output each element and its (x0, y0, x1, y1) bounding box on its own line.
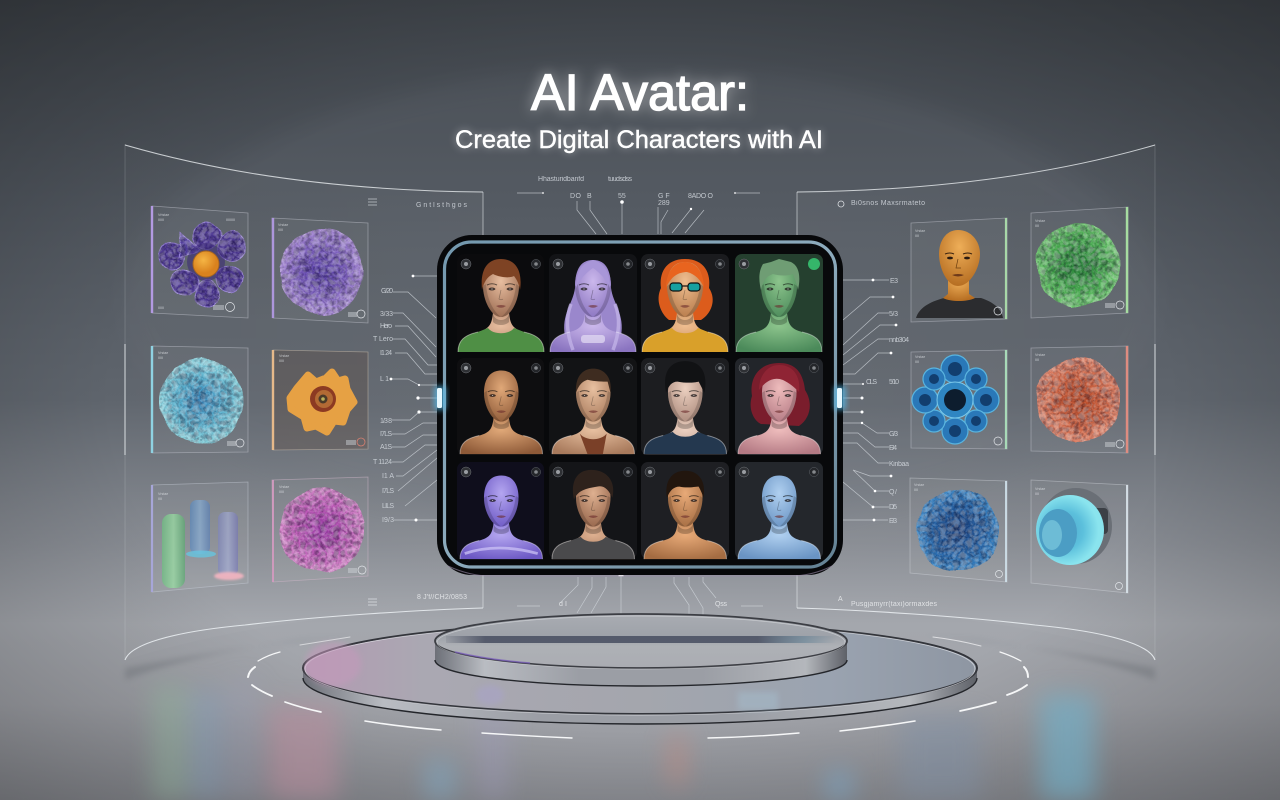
pedestal platform (435, 614, 847, 686)
card: purple cell: Vrstae (278, 223, 288, 227)
card: purple flower: IIIIIIIII (226, 218, 235, 222)
device bezel (437, 235, 843, 575)
left connector lines and labels (373, 275, 437, 524)
left connector lines and labels: 1/3 8 (380, 418, 392, 425)
card: green cell (1031, 207, 1128, 318)
left connector lines and labels: I7LS (380, 431, 392, 438)
top connector labels: G F (658, 193, 670, 200)
card: purple flower: IIIIII (158, 218, 164, 222)
dashed orbit ring (248, 637, 1028, 738)
icon: blue flower petals (912, 355, 999, 444)
avatar: black curly hair, navy top (641, 358, 729, 455)
card: pink cell (272, 477, 368, 582)
card: test tubes: IIII (158, 497, 162, 501)
floor colour reflections (152, 680, 1095, 800)
panel footer left: 8 J'f//CH2/0853 (417, 594, 467, 601)
card: blue cell (910, 478, 1007, 582)
left panel outline arcs (125, 144, 483, 660)
left connector lines and labels: I9/3 (382, 517, 394, 524)
wall to floor curved shadow (125, 632, 1155, 680)
card: orange head (911, 218, 1007, 322)
bottom connector lines and labels: dI (559, 601, 567, 608)
left connector lines and labels: I1 A (382, 473, 394, 480)
device right light (834, 386, 846, 410)
panel header left: Gntlsthgos (416, 202, 468, 209)
card: red cell: Vrstae (1035, 353, 1045, 357)
panel header left (368, 199, 468, 209)
avatar: auburn hair, green shirt (457, 254, 544, 352)
card: cyan button: IIII (1035, 492, 1039, 496)
title: AI Avatar: (531, 64, 749, 121)
card: cyan button (1031, 480, 1128, 593)
left connector lines and labels: A1S (380, 444, 392, 451)
panel footer right: A (838, 596, 843, 603)
top connector labels: DO (570, 193, 582, 200)
device frame (444, 242, 836, 567)
card: orange flower (273, 350, 368, 450)
left connector lines and labels: L1 (380, 376, 389, 383)
icon: orange bald bust (916, 230, 1003, 318)
card: cyan cell (152, 346, 248, 453)
avatar: green skin and hair (735, 254, 823, 352)
card: purple flower: Vrtstae (158, 213, 169, 217)
left connector lines and labels: 3/33 (380, 311, 393, 318)
left connector lines and labels: I7LS (382, 488, 394, 495)
left connector lines and labels: LILS (382, 503, 394, 510)
card: blue flower: Vrstae (915, 355, 925, 359)
card: pink cell: IIIII (279, 490, 284, 494)
card: red cell: IIII (1035, 358, 1039, 362)
icon: flower petals (159, 223, 246, 308)
avatar: bald tan (457, 358, 544, 455)
device left light (434, 386, 446, 410)
card: cyan cell: IIIII (158, 356, 163, 360)
right connector lines and labels: Kinbaa (889, 461, 909, 468)
top connector lines (517, 192, 760, 234)
avatar: dark red curly hair (735, 358, 823, 455)
right connector lines and labels: E3 (890, 278, 898, 285)
icon: blue cylinder (186, 500, 216, 558)
top connector labels: 8ADO O (688, 193, 714, 200)
card: pink cell: Vrstae (279, 485, 289, 489)
badge: green status (808, 258, 820, 270)
left holographic glass panel (125, 144, 483, 660)
right holographic glass panel (797, 144, 1155, 660)
top connector labels: 289 (658, 200, 670, 207)
left connector lines and labels: T 1124 (373, 459, 392, 466)
right connector lines and labels: D/5 (889, 504, 897, 511)
avatar: orange curly hair, teal glasses (641, 254, 729, 352)
avatar: slicked hair, net top (549, 358, 637, 455)
panel footer right (838, 596, 938, 608)
bottom connector lines and labels (517, 574, 763, 615)
card: green cell: IIII (1035, 224, 1039, 228)
card: cyan cell: Vrstae (158, 351, 168, 355)
top connector labels: tuudsdss (608, 176, 632, 183)
right connector lines and labels: 5/3 (889, 311, 898, 318)
top connector labels: B (587, 193, 592, 200)
left connector lines and labels: I1 24 (380, 350, 392, 357)
card: test tubes (152, 482, 248, 592)
icon: lavender cylinder (214, 512, 244, 580)
card: red cell (1031, 346, 1128, 453)
card: test tubes: Vrstae (158, 492, 168, 496)
icon: orange gear flower (290, 372, 354, 432)
card: green cell: Vrstae (1035, 219, 1045, 223)
panel header right: Bi0snos Maxsrmateto (851, 200, 925, 207)
avatar: brown bob, grey top (549, 462, 637, 559)
card: blue cell: IIII (914, 488, 918, 492)
card: purple flower (152, 206, 248, 318)
card: blue flower: IIII (915, 360, 919, 364)
left connector lines and labels: T Lero (373, 336, 393, 343)
card: purple cell (272, 218, 368, 323)
card: purple flower: IIIIII (158, 306, 164, 310)
card: orange flower: IIIII (279, 359, 284, 363)
icon: green cylinder (162, 514, 185, 588)
right connector lines and labels: Q/ (889, 489, 897, 496)
card: cyan button: Vrstae (1035, 487, 1045, 491)
top connector labels: 55 (618, 193, 626, 200)
top connector labels (538, 176, 714, 207)
panel footer right: Pusgjamyrr(taxi)ormaxdes (851, 601, 938, 608)
right connector lines and labels (843, 278, 909, 525)
right connector lines and labels: G/3 (889, 431, 898, 438)
avatar: short dark hair, bare shoulders (641, 462, 729, 559)
avatar: lavender long hair (549, 254, 637, 352)
right connector lines and labels: E/3 (889, 518, 897, 525)
avatar: blue bald (735, 462, 823, 559)
card: orange head: Vrstae (915, 229, 925, 233)
top connector labels: Hhasturidbanfd (538, 176, 584, 183)
right connector lines and labels: CLS (866, 379, 877, 386)
card: orange head: IIII (915, 234, 919, 238)
bottom connector lines and labels: Qss (715, 601, 728, 608)
card: blue flower (911, 350, 1007, 449)
right connector lines and labels: E/4 (889, 445, 897, 452)
card: blue cell: Vrstae (914, 483, 924, 487)
right panel outline arcs (797, 144, 1155, 660)
card: orange flower: Vrstae (279, 354, 289, 358)
tablet device (434, 235, 846, 576)
left connector lines and labels: G/20 (381, 288, 393, 295)
right connector lines and labels: 5/10 (889, 379, 899, 386)
subtitle: Create Digital Characters with AI (455, 126, 823, 154)
left connector lines and labels: Hero (380, 323, 392, 330)
avatar: purple bald (457, 462, 544, 559)
icon: glowing button (1036, 488, 1112, 565)
card: purple cell: IIIII (278, 228, 283, 232)
large circular platform (303, 622, 977, 724)
right connector lines and labels: nnb304 (889, 337, 909, 344)
panel footer left (368, 594, 467, 605)
